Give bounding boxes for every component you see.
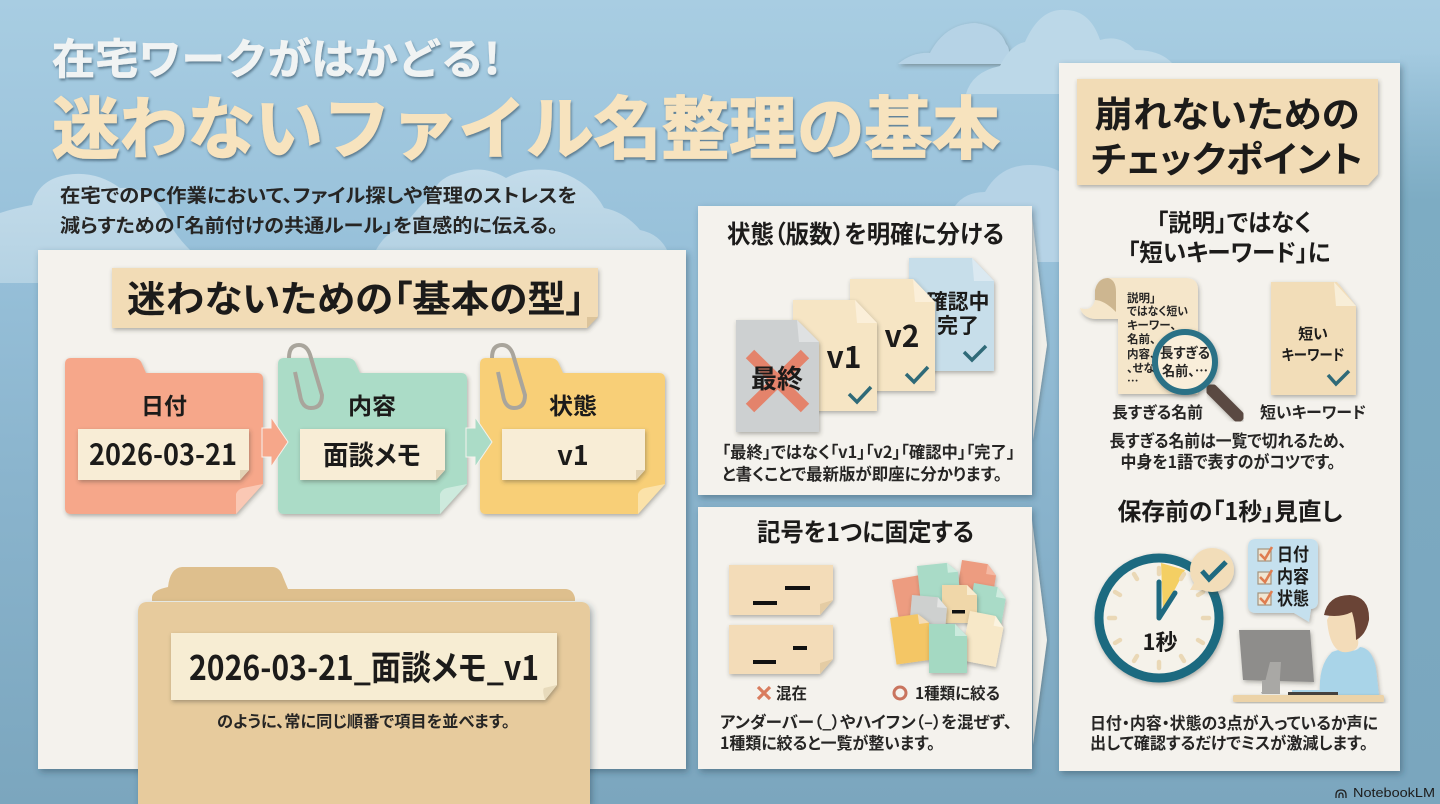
label: mixed: 混在	[776, 680, 807, 704]
folder: status	[480, 345, 665, 514]
panel: checkpoints: 保存前の「1秒」見直し	[1118, 492, 1342, 527]
icon: magnifier	[1155, 332, 1238, 416]
big folder with example: のように、常に同じ順番で項目を並べます。	[217, 708, 510, 732]
icon: long name scroll	[1080, 278, 1198, 394]
icon: magnifier: 長すぎる	[1160, 343, 1210, 363]
panel: version status	[698, 206, 1047, 495]
panel: version status: 状態（版数）を明確に分ける	[727, 215, 1004, 251]
intro text: 在宅でのPC作業において、ファイル探しや管理のストレスを	[60, 181, 577, 208]
folder: content: 内容	[348, 387, 396, 421]
doc: v2: v2	[885, 312, 919, 356]
icon: paperclip	[492, 345, 525, 408]
example file name label: 2026-03-21_面談メモ_v1	[189, 641, 539, 690]
icon: long name scroll: 名前、	[1127, 331, 1156, 347]
folder: date: 日付	[141, 387, 187, 421]
doc: confirmed and done: 完了	[937, 310, 979, 340]
panel: checkpoints: 長すぎる名前	[1112, 399, 1203, 423]
subheading: short keywords: 「短いキーワード」に	[1128, 233, 1330, 268]
intro text	[60, 181, 577, 238]
panel: version status: と書くことで最新版が即座に分かります。	[722, 461, 1002, 485]
doc: v1	[793, 300, 877, 411]
doc: confirmed and done: 確認中	[926, 286, 990, 316]
icon: short keyword doc: キーワード	[1282, 344, 1344, 365]
panel: basic format	[38, 250, 686, 804]
folder: content: 面談メモ	[323, 434, 421, 473]
icon: one second clock: 1秒	[1143, 625, 1177, 657]
panel: separators: 記号を1つに固定する	[757, 513, 974, 549]
panel: checkpoints	[1059, 63, 1400, 771]
card: mixed separators 1	[729, 565, 833, 615]
card: mixed separators 2	[729, 625, 833, 674]
icon: long name scroll: 、せな	[1127, 360, 1155, 376]
speech bubble: checklist: 日付	[1277, 541, 1309, 567]
panel: checkpoints: 出して確認するだけでミスが激減します。	[1090, 730, 1368, 754]
icon: long name scroll: 内容、	[1127, 346, 1156, 362]
folder: content	[278, 345, 467, 514]
speech bubble: checklist: 内容	[1277, 563, 1309, 589]
icon: person at computer	[1233, 595, 1384, 702]
speech bubble: checklist	[1248, 539, 1318, 622]
label: one type: 1種類に絞る	[915, 680, 1000, 704]
doc: v2	[850, 279, 935, 391]
label: mixed	[758, 680, 807, 704]
heading: checkpoints: チェックポイント	[1091, 131, 1363, 183]
big folder with example	[138, 567, 590, 804]
doc: confirmed and done	[909, 258, 994, 371]
folder: status: 状態	[549, 387, 597, 421]
heading: checkpoints	[1077, 79, 1378, 185]
panel: checkpoints: 中身を1語で表すのがコツです。	[1120, 448, 1336, 473]
subheading: short keywords: 「説明」ではなく	[1156, 203, 1312, 238]
icon: one second clock	[1099, 558, 1219, 678]
icon: long name scroll: …	[1127, 373, 1138, 389]
panel: checkpoints: 日付・内容・状態の3点が入っているか声に	[1090, 710, 1378, 734]
background clouds	[0, 10, 1172, 283]
example file name label	[171, 633, 557, 700]
folder: date	[65, 358, 263, 514]
icon: short keyword doc	[1271, 282, 1356, 395]
folder: date: 2026-03-21	[89, 432, 237, 474]
subheading: short keywords	[1128, 203, 1330, 268]
icon: long name scroll: 説明」	[1127, 290, 1156, 306]
doc: v1: v1	[827, 333, 861, 377]
icon: long name scroll: キーワー、	[1127, 317, 1176, 333]
icon: magnifier: 名前、…	[1162, 361, 1208, 381]
watermark: NotebookLM: NotebookLM	[1353, 785, 1435, 800]
intro text: 減らすための「名前付けの共通ルール」を直感的に伝える。	[60, 211, 558, 238]
arrow: content to status	[466, 417, 492, 467]
arrow: date to content	[262, 417, 288, 467]
panel: version status: 「最終」ではなく「v1」「v2」「確認中」「完了」	[722, 439, 1015, 463]
panel: separators: 1種類に絞ると一覧が整います。	[720, 730, 935, 754]
icon: long name scroll: ではなく短い	[1127, 303, 1188, 319]
panel: checkpoints: 長すぎる名前は一覧で切れるため、	[1110, 427, 1346, 452]
title: 迷わないファイル名整理の基本	[52, 74, 1000, 173]
icon: check bubble	[1190, 548, 1234, 592]
panel: separators	[698, 507, 1047, 769]
panel: checkpoints: 短いキーワード	[1260, 399, 1366, 423]
folder: status: v1	[557, 434, 589, 473]
heading: checkpoints: 崩れないための	[1094, 86, 1360, 138]
doc: crossed out final: 最終	[751, 359, 803, 396]
panel: separators: アンダーバー（_）やハイフン（–）を混ぜず、	[720, 709, 1012, 733]
title: 在宅ワークがはかどる!	[52, 26, 500, 87]
speech bubble: checklist: 状態	[1277, 585, 1309, 611]
heading: basic format: 迷わないための「基本の型」	[127, 269, 585, 323]
title	[52, 26, 1000, 173]
doc: crossed out final	[736, 320, 819, 432]
icon: paperclip	[289, 345, 322, 408]
icon: short keyword doc: 短い	[1298, 323, 1328, 344]
icon: pile of files	[890, 560, 1007, 673]
